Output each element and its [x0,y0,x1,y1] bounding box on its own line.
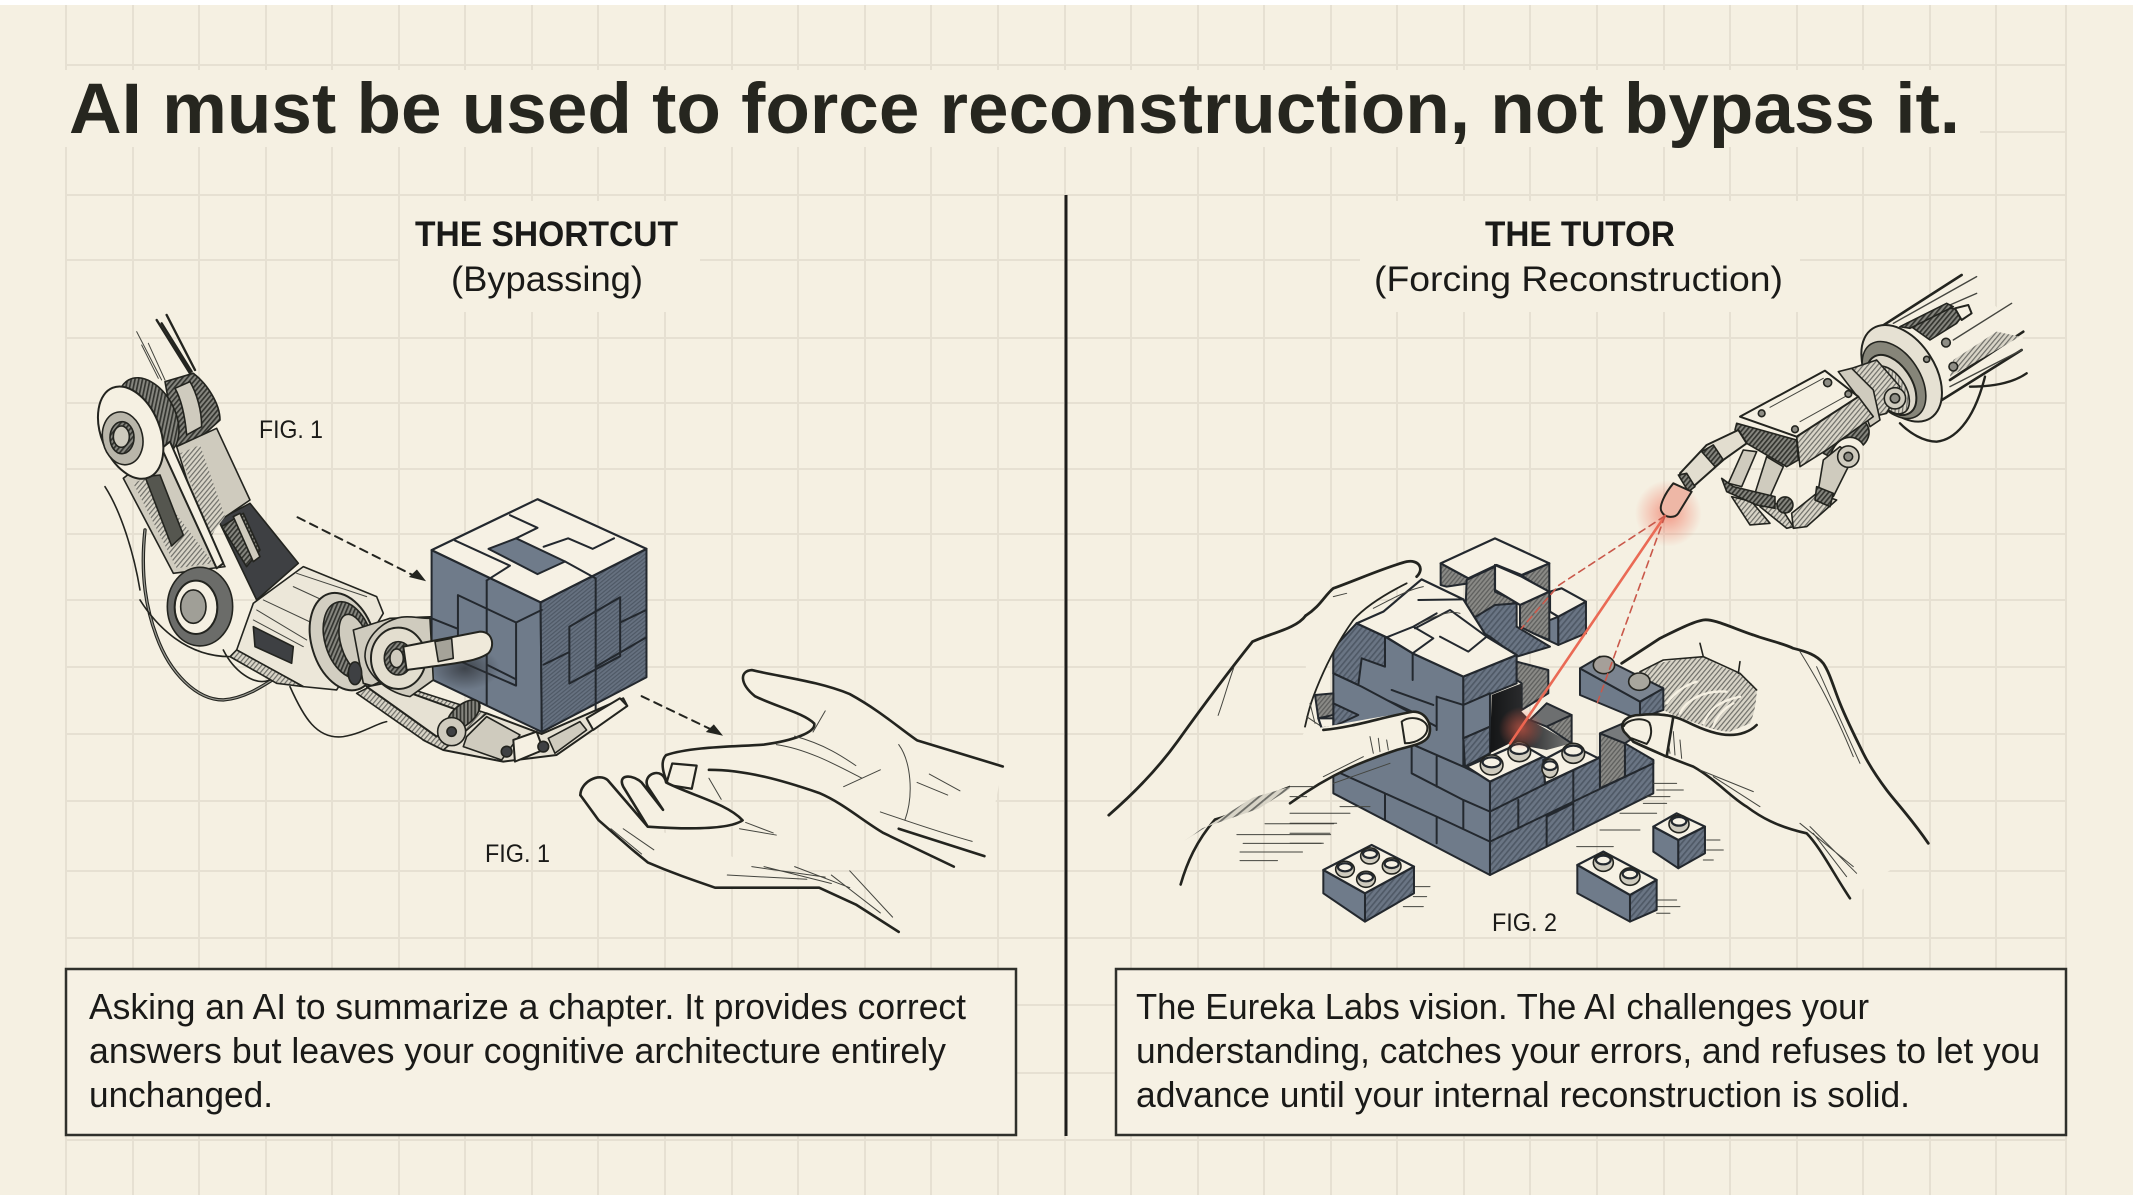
loose brick 1x1 [1653,813,1723,868]
label: fig 1 upper: FIG. 1 [259,416,323,444]
text box: shortcut description: answers but leaves your cognitive architecture entirely [89,1030,946,1071]
icon: robot arm [85,315,433,737]
text box: tutor description: advance until your internal reconstruction is solid. [1136,1074,1910,1115]
icon: laser beams [1499,516,1665,750]
arrow: arm to cube [298,517,426,581]
right thumb [1622,714,1673,757]
lego tops with studs [1467,742,1598,783]
loose brick 2x2 [1323,845,1430,922]
upper brick stack [1333,579,1572,767]
heading: the tutor [1374,215,1783,299]
label: fig 2: FIG. 2 [1492,909,1557,937]
text box: shortcut description: Asking an AI to summarize a chapter. It provides correct [89,986,966,1027]
arrow: cube to hand [642,696,723,736]
icon: upper human hand [663,670,1003,867]
held brick [1580,656,1663,720]
panel: the tutor [1109,215,2066,1135]
icon: robot tutor arm [1635,275,2027,547]
label: fig 1 lower: FIG. 1 [485,840,550,868]
back block cluster [1441,538,1586,657]
text box: tutor description [1116,969,2066,1135]
vertical divider [1064,195,1068,1136]
text box: tutor description: understanding, catches your errors, and refuses to let you [1136,1030,2040,1071]
text box: tutor description: The Eureka Labs vision. The AI challenges your [1136,986,1869,1027]
icon: slate puzzle cube [432,499,646,732]
text box: shortcut description [66,969,1016,1135]
right hand [1577,620,1928,898]
heading: the shortcut: THE SHORTCUT [415,215,678,254]
icon: lower human hand [580,773,899,932]
heading: the shortcut [415,215,678,299]
icon: brick structure with hands [1290,538,1653,922]
loose brick 2x1 [1577,852,1680,922]
text box: shortcut description: unchanged. [89,1074,273,1115]
heading: the tutor: (Forcing Reconstruction) [1374,260,1783,299]
lower brick base [1333,723,1653,875]
title: AI must be used to force reconstruction, not bypass it. [69,70,1960,149]
icon: left hand wrist outline [1109,590,1346,885]
left hand fingers [1290,561,1460,843]
illustration: solved cube and human hands [298,499,1003,932]
heading: the shortcut: (Bypassing) [451,260,643,299]
icon: right hand, held brick and loose bricks [1577,620,1928,922]
panel: the shortcut [66,215,1016,1135]
icon: robot finger and gripper [357,617,627,762]
heading: the tutor: THE TUTOR [1485,215,1675,254]
thumb nail [1624,719,1651,744]
